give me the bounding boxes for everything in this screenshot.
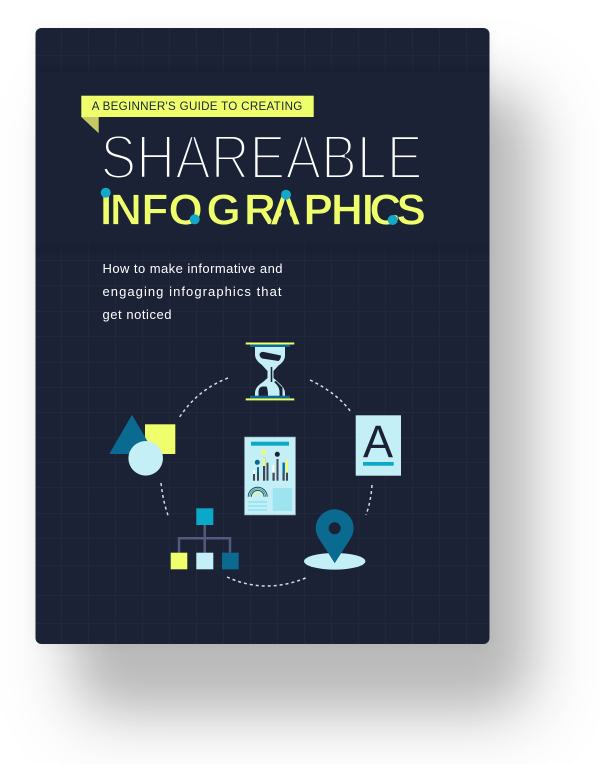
infographic cover (36, 28, 490, 644)
dashed cycle arcs (161, 378, 372, 586)
icon: org chart (171, 508, 239, 569)
ribbon: subtitle banner: A BEGINNER'S GUIDE TO CREATING (92, 100, 302, 113)
icon: hourglass (246, 342, 294, 400)
panel: cover background (35, 28, 490, 644)
ribbon: subtitle banner (81, 96, 314, 133)
intro text: get noticed (102, 307, 172, 322)
icon: mini infographic (244, 437, 296, 515)
icon: location pin (304, 509, 365, 570)
icon: geometric shapes (109, 415, 175, 476)
card drop shadow (76, 92, 528, 708)
intro text (102, 261, 282, 322)
title: SHAREABLE: SHAREABLE (100, 123, 422, 193)
icon: text card (356, 415, 401, 476)
intro text: engaging infographics that (102, 284, 282, 299)
intro text: How to make informative and (102, 261, 282, 276)
icon: text card: A (363, 416, 393, 467)
outer soft shadow (48, 70, 558, 742)
title: INFOGRAPHICS: INFOGRAPHICS (100, 186, 426, 235)
